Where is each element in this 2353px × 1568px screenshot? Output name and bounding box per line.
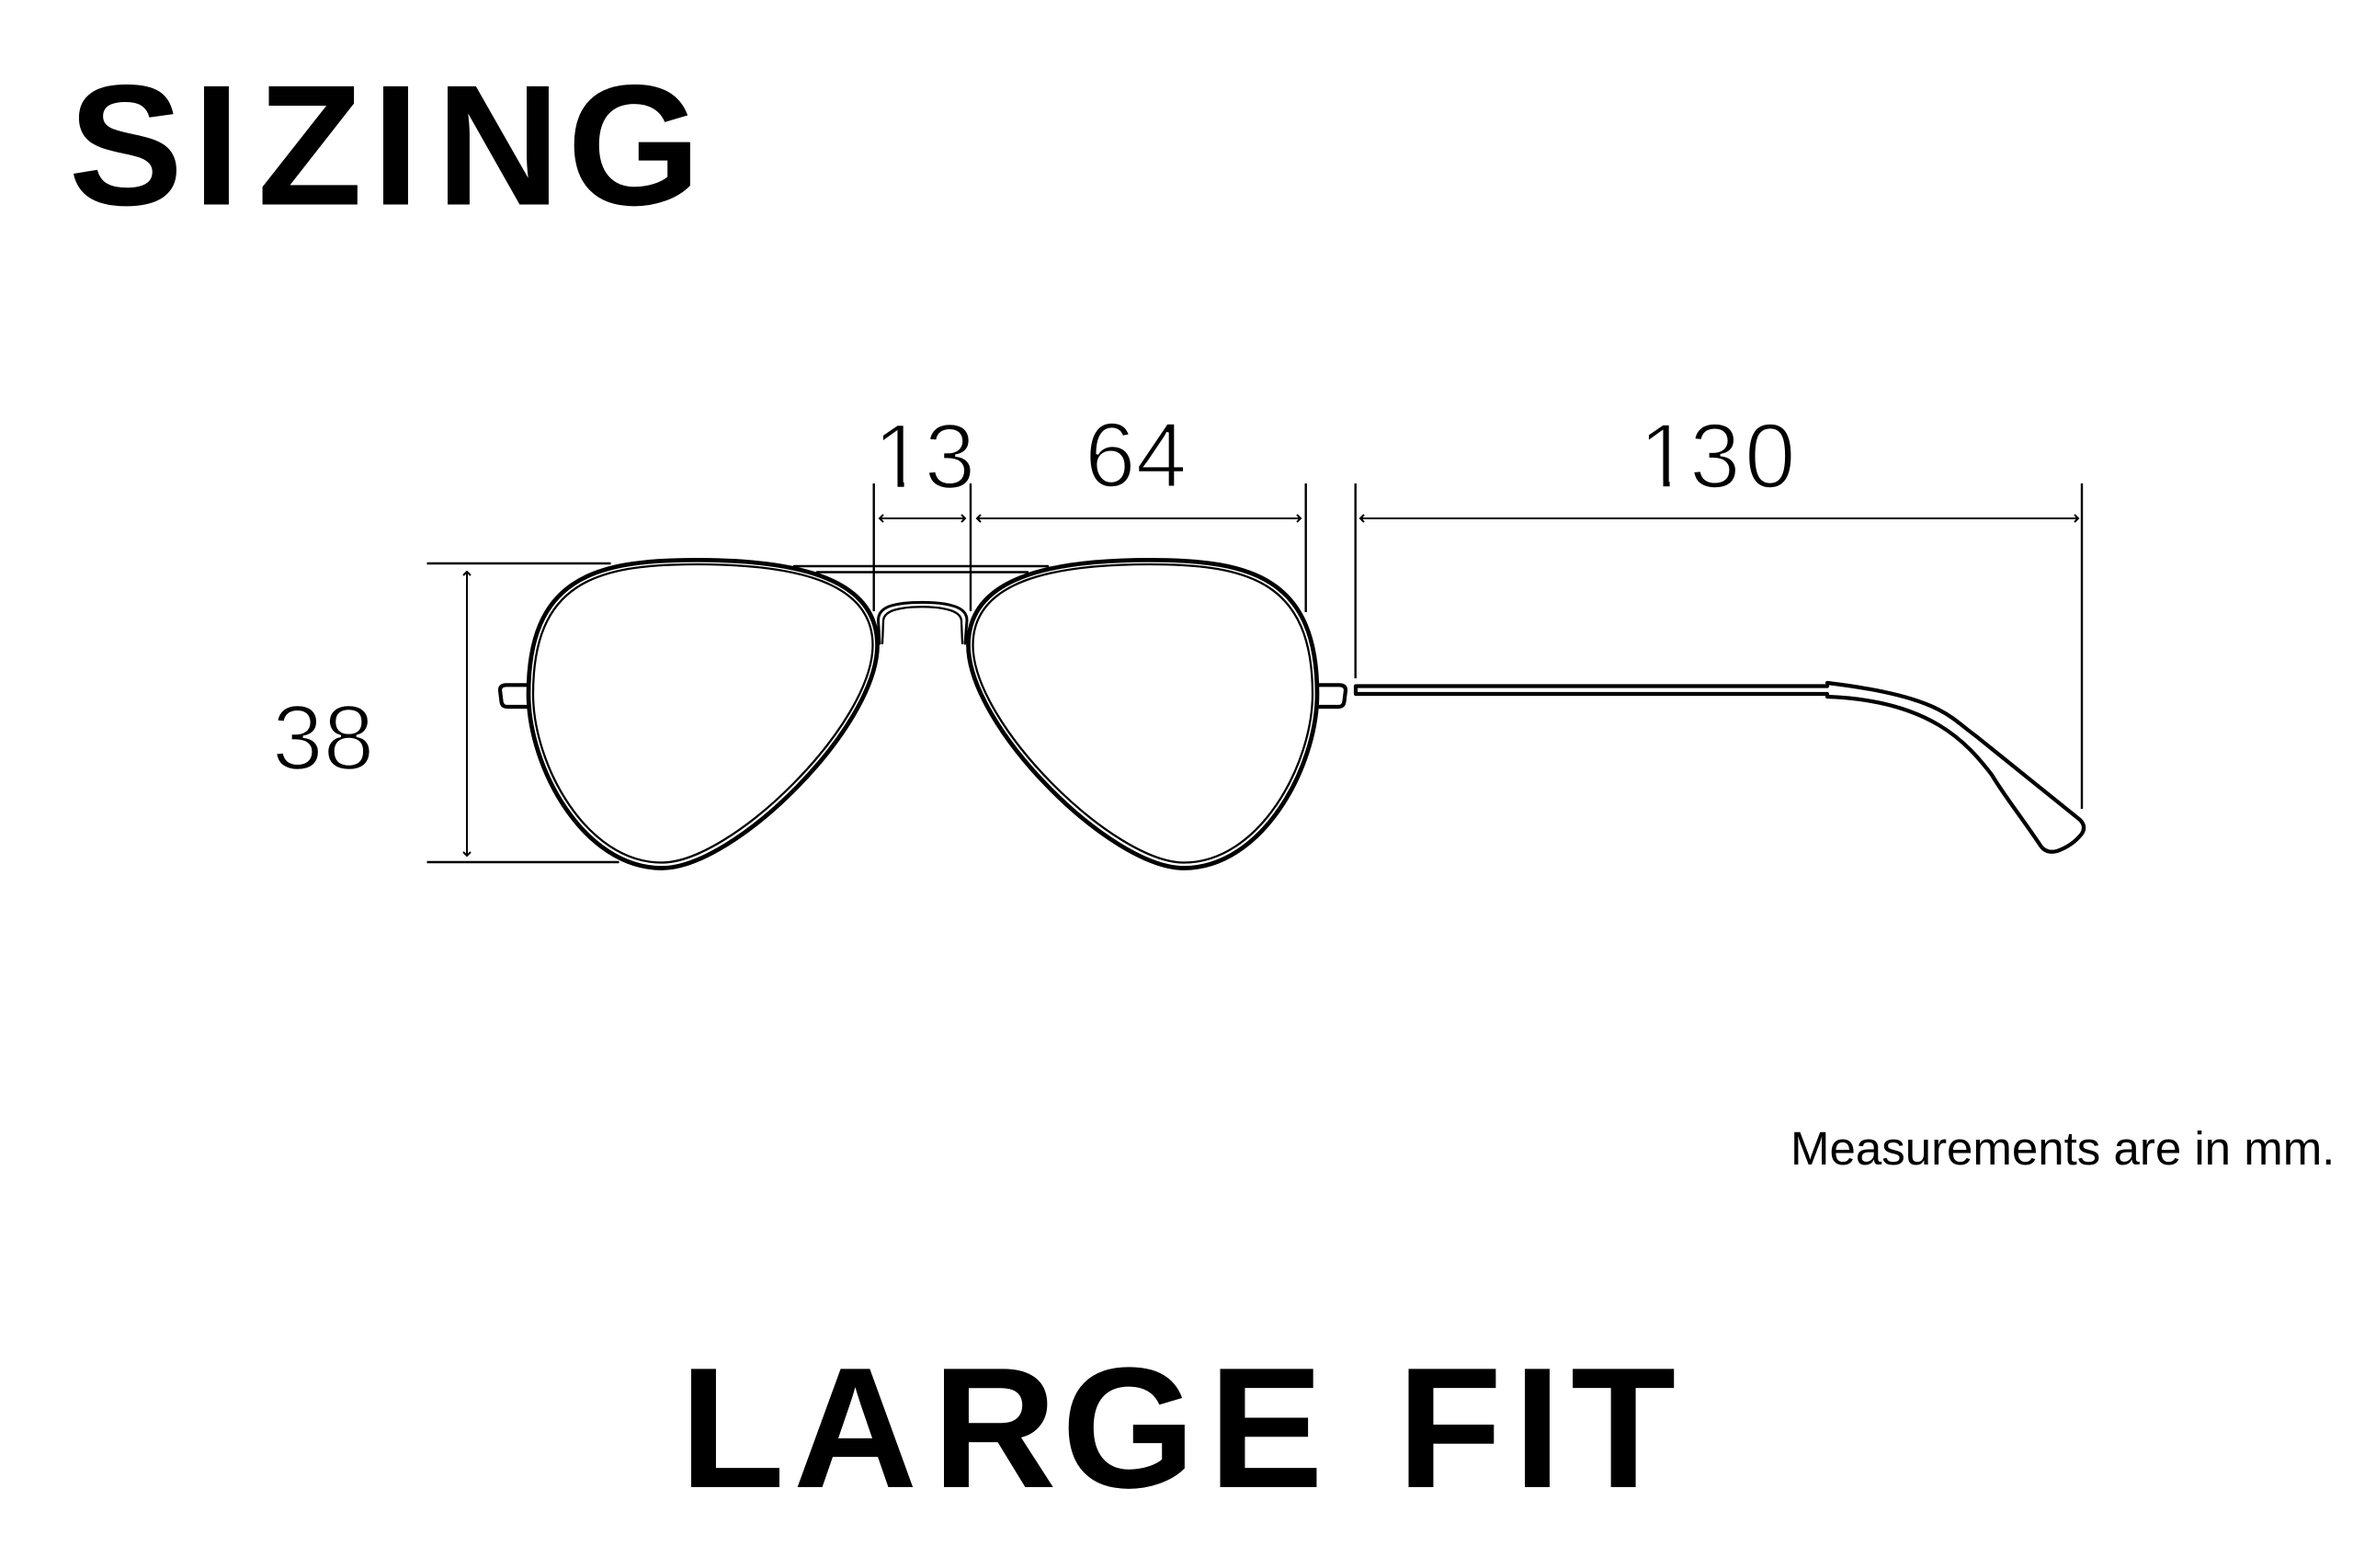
nose bridge [879, 602, 967, 643]
units note: Measurements are in mm. [1790, 1122, 2335, 1175]
measurement 64: lens width [977, 404, 1306, 612]
dimension lines [874, 483, 971, 611]
temple straight bar [1356, 686, 1827, 694]
value 38: 38 [272, 687, 374, 790]
measurement 130: temple length [1356, 404, 2082, 809]
dimension lines [1356, 483, 2082, 809]
temple ear tip [1827, 683, 2084, 852]
value 130: 130 [1639, 404, 1796, 507]
right lens [969, 560, 1317, 868]
value 13: 13 [873, 405, 975, 508]
left lens [529, 560, 877, 868]
value 64: 64 [1085, 404, 1187, 507]
dimension lines [426, 563, 620, 862]
right hinge [1319, 685, 1346, 707]
title: sizing: SIZING [68, 50, 700, 241]
temple arm side view [1356, 683, 2084, 852]
left hinge [500, 685, 527, 707]
measurement 38: lens height [272, 563, 620, 862]
dimension lines [977, 483, 1306, 612]
glasses front view [500, 560, 1346, 868]
top bridge bar [794, 566, 1048, 572]
measurement 13: bridge width [873, 405, 975, 611]
fit label: LARGE FIT [680, 1332, 1676, 1524]
